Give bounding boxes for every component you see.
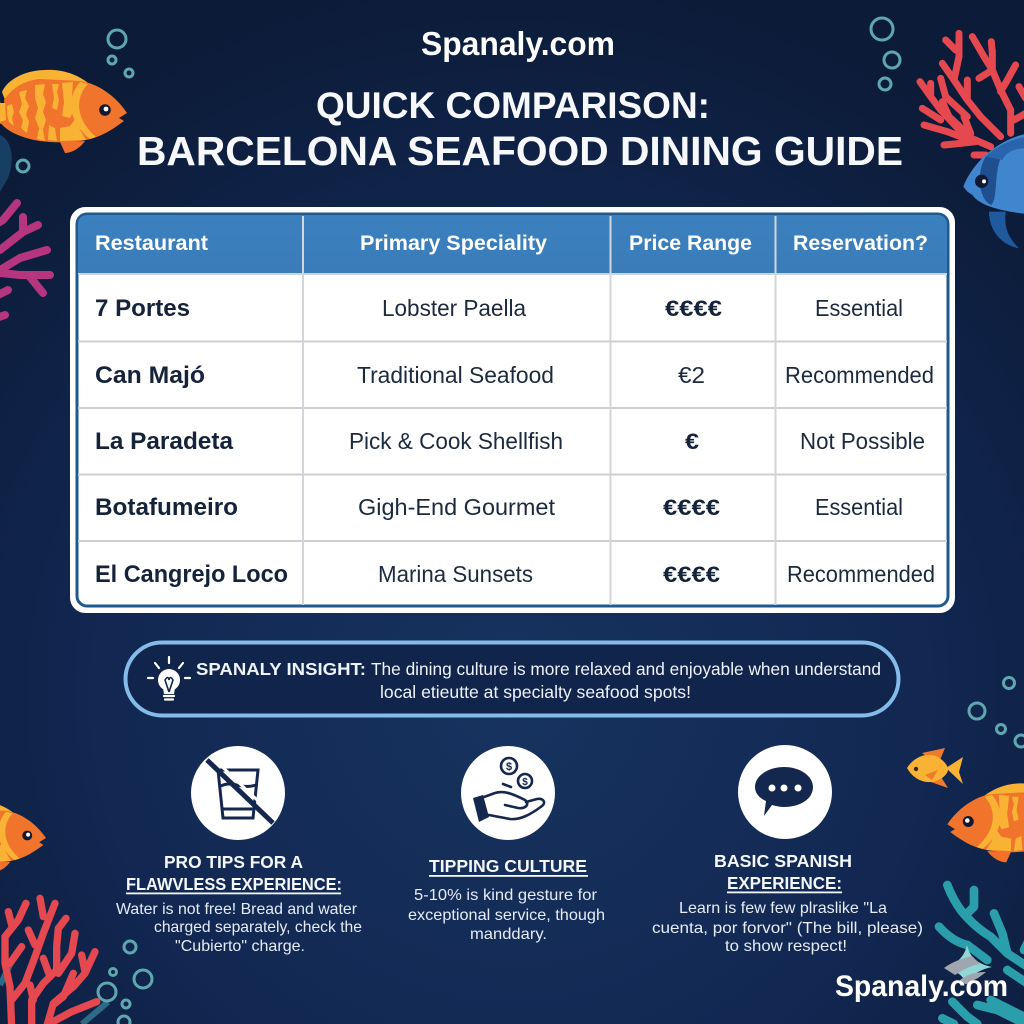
coral: magenta top left	[0, 203, 50, 318]
row: 7 Portes: 7 Portes	[95, 295, 190, 322]
row: 7 Portes: €€€€	[665, 296, 722, 321]
row: El Cangrejo Loco: €€€€	[663, 562, 720, 587]
text block: basic Spanish: EXPERIENCE:	[727, 873, 842, 893]
text block: basic Spanish: BASIC SPANISH	[714, 851, 852, 871]
row: Botafumeiro: €€€€	[663, 495, 720, 520]
watermark: sparkle	[944, 945, 992, 985]
text block: pro tips: FLAWVLESS EXPERIENCE:	[126, 874, 342, 894]
icon: tipping hand: $	[522, 777, 528, 788]
icon: tipping hand: $	[506, 761, 512, 773]
insight text: local etieutte at specialty seafood spots!	[380, 682, 691, 702]
text block: tipping culture: exceptional service, though	[408, 907, 605, 924]
row: Botafumeiro: Botafumeiro	[95, 494, 238, 521]
coral: red top right	[920, 33, 1024, 155]
row: El Cangrejo Loco: Recommended	[787, 561, 935, 587]
icon: speech bubble	[738, 745, 832, 839]
insight text	[196, 659, 881, 702]
row: El Cangrejo Loco: Marina Sunsets	[378, 561, 533, 587]
coral: red bottom left	[5, 898, 97, 1024]
table header: Price Range	[629, 232, 752, 255]
row: 7 Portes: Lobster Paella	[382, 295, 526, 321]
text block: pro tips: PRO TIPS FOR A	[164, 852, 303, 872]
text block: basic Spanish: to show respect!	[725, 938, 847, 955]
text block: basic Spanish: Learn is few few plraslike "La	[679, 900, 887, 917]
text block: pro tips	[116, 852, 362, 955]
text block: basic Spanish: cuenta, por forvor" (The bill, please)	[652, 920, 923, 937]
row: Can Majó: Traditional Seafood	[357, 362, 554, 388]
table header: Restaurant	[95, 232, 208, 255]
icon: no water glass	[191, 746, 285, 840]
brand: bottom: Spanaly.com	[835, 970, 1008, 1003]
brand: top: Spanaly.com	[421, 25, 615, 62]
bubbles: right	[969, 678, 1024, 747]
fish: small yellow	[907, 748, 963, 788]
text block: pro tips: "Cubierto" charge.	[175, 938, 305, 955]
icon: tipping hand	[461, 746, 555, 840]
row: Can Majó: Can Majó	[95, 362, 205, 389]
table header	[95, 232, 928, 255]
title	[137, 85, 903, 174]
insight text: SPANALY INSIGHT:	[196, 659, 366, 679]
text block: tipping culture: manddary.	[470, 926, 547, 943]
text block: tipping culture: 5-10% is kind gesture for	[414, 887, 598, 904]
table header: Reservation?	[793, 232, 928, 255]
row: La Paradeta: La Paradeta	[95, 428, 234, 455]
insight text: The dining culture is more relaxed and enjoyable when understand	[371, 659, 881, 679]
row: La Paradeta: Not Possible	[800, 428, 925, 454]
row: La Paradeta: €	[685, 429, 699, 454]
text block: pro tips: charged separately, check the	[154, 919, 362, 936]
row: La Paradeta: Pick & Cook Shellfish	[349, 428, 563, 454]
row: El Cangrejo Loco: El Cangrejo Loco	[95, 561, 288, 588]
fish: orange top left	[0, 70, 127, 153]
fish: orange bottom left	[0, 801, 46, 872]
title: BARCELONA SEAFOOD DINING GUIDE	[137, 128, 903, 174]
text block: tipping culture	[408, 856, 605, 943]
bubbles: top left	[17, 30, 133, 172]
fish: orange right	[947, 783, 1024, 862]
title: QUICK COMPARISON:	[316, 85, 710, 126]
callout: Spanaly insight	[126, 642, 898, 716]
row: Can Majó: €2	[678, 362, 705, 388]
row: Can Majó: Recommended	[785, 362, 934, 388]
row: Botafumeiro: Essential	[815, 494, 903, 520]
row: Botafumeiro: Gigh-End Gourmet	[358, 494, 556, 520]
bubbles: top right	[871, 18, 900, 90]
fish: blue top right	[963, 133, 1024, 248]
row: El Cangrejo Loco	[95, 561, 935, 588]
icon: light bulb	[148, 657, 190, 700]
coral: teal bottom right	[939, 885, 1024, 1024]
row: 7 Portes	[95, 295, 903, 322]
panel: comparison table	[72, 208, 954, 612]
bubbles: bottom left	[98, 941, 152, 1024]
table header: Primary Speciality	[360, 232, 547, 255]
text block: tipping culture: TIPPING CULTURE	[429, 856, 587, 876]
row: 7 Portes: Essential	[815, 295, 903, 321]
row: Can Majó	[95, 362, 934, 389]
seaweed: left shade	[0, 135, 12, 192]
row: La Paradeta	[95, 428, 925, 455]
text block: pro tips: Water is not free! Bread and water	[116, 901, 358, 918]
seaweed: bottom left	[0, 965, 108, 1024]
row: Botafumeiro	[95, 494, 903, 521]
text block: basic Spanish	[652, 851, 923, 955]
